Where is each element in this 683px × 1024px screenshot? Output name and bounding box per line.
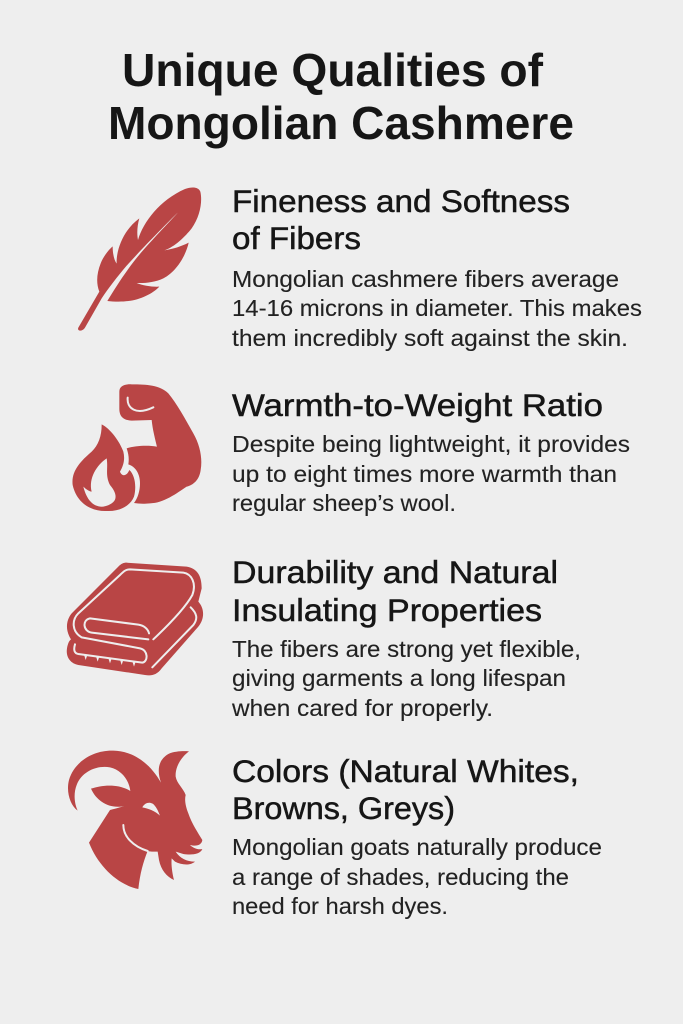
body text: a range of shades, reducing the: [232, 864, 569, 890]
body text: Despite being lightweight, it provides: [232, 431, 630, 457]
body text: [232, 834, 602, 919]
icon: folded blankets: [67, 563, 203, 675]
body text: [232, 431, 630, 516]
body text: [232, 266, 642, 351]
icon: feather: [78, 187, 201, 331]
heading: Browns, Greys): [232, 790, 455, 826]
heading: Warmth-to-Weight Ratio: [232, 387, 603, 423]
body text: regular sheep’s wool.: [232, 490, 456, 516]
body text: 14-16 microns in diameter. This makes: [232, 295, 642, 321]
panel: natural colors: [68, 751, 602, 919]
body text: Mongolian cashmere fibers average: [232, 266, 619, 292]
body text: need for harsh dyes.: [232, 893, 448, 919]
heading: of Fibers: [232, 220, 361, 256]
body text: up to eight times more warmth than: [232, 461, 617, 487]
panel: durability and insulating properties: [67, 554, 581, 721]
title: [108, 44, 574, 149]
body text: [231, 636, 581, 721]
heading: Colors (Natural Whites,: [232, 753, 579, 789]
body text: them incredibly soft against the skin.: [232, 325, 628, 351]
body text: Mongolian goats naturally produce: [232, 834, 602, 860]
body text: giving garments a long lifespan: [232, 665, 566, 691]
title: Unique Qualities of: [122, 44, 544, 96]
heading: [232, 554, 558, 628]
heading: [232, 753, 579, 826]
heading: [232, 183, 570, 256]
heading: Durability and Natural: [232, 554, 558, 590]
panel: fineness and softness: [78, 183, 642, 351]
body text: The fibers are strong yet flexible,: [232, 636, 581, 662]
panel: warmth-to-weight ratio: [72, 384, 630, 516]
heading: Fineness and Softness: [232, 183, 570, 219]
icon: flexed arm with flame: [72, 384, 201, 511]
title: Mongolian Cashmere: [108, 97, 574, 149]
icon: goat head: [68, 751, 202, 889]
heading: Insulating Properties: [232, 592, 542, 628]
body text: when cared for properly.: [231, 695, 493, 721]
